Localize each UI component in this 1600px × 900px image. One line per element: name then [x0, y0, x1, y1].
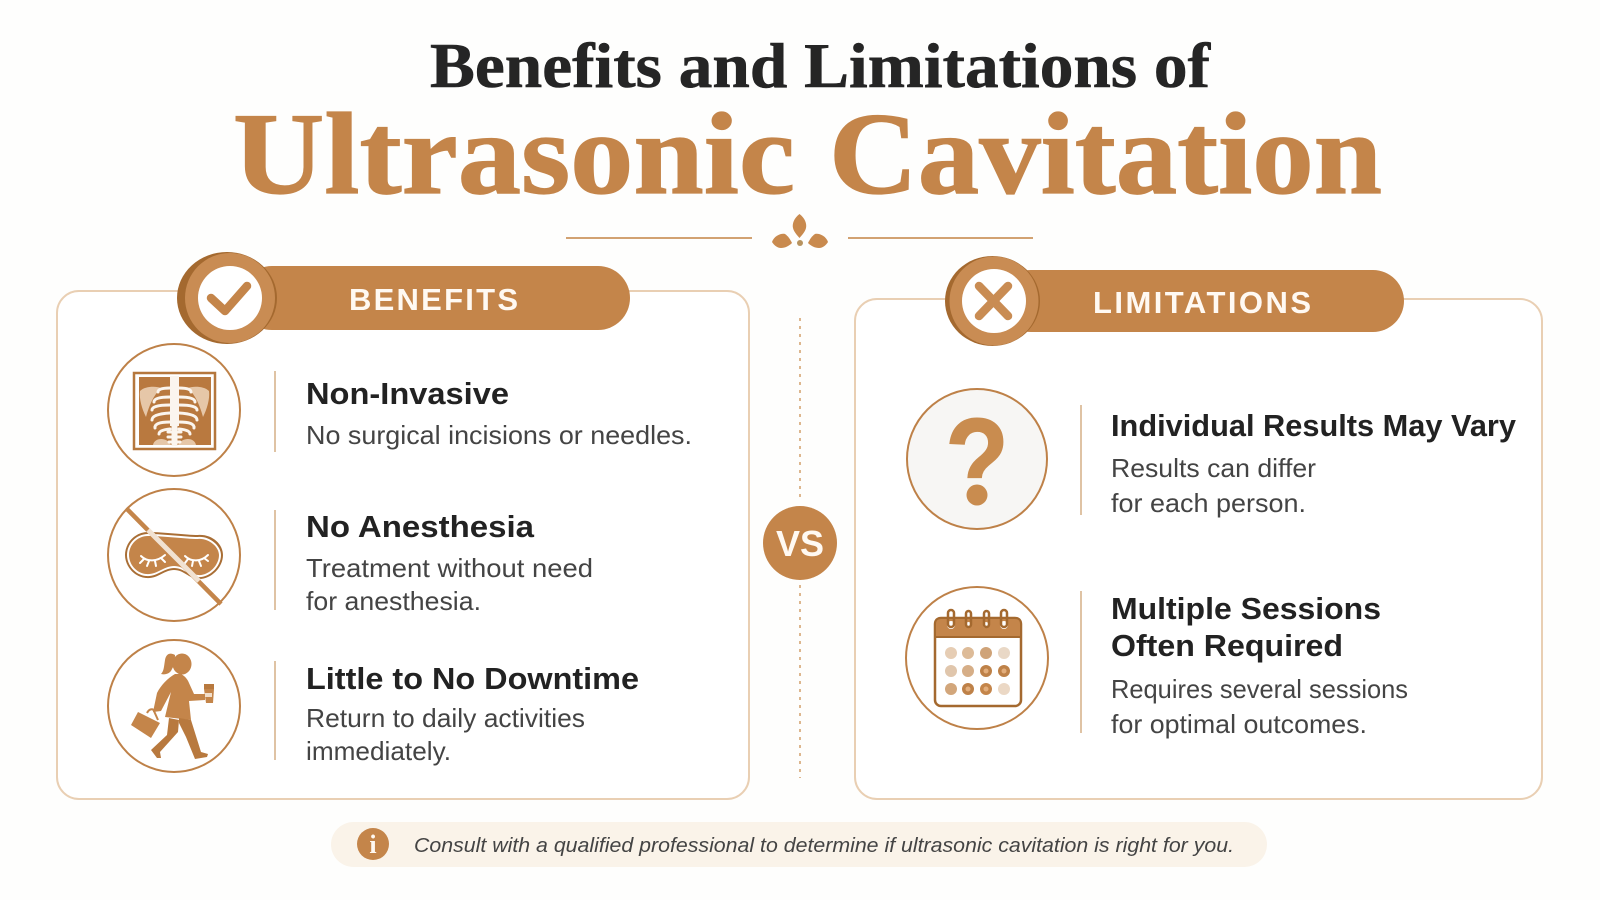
icon: question mark: [907, 389, 1047, 529]
footer note: [331, 822, 1267, 867]
icon: calendar: [906, 587, 1048, 729]
limitations header: LIMITATIONS: [1093, 285, 1311, 320]
item: no anesthesia: [274, 509, 593, 616]
icon: question mark: ?: [945, 393, 1009, 529]
title: Cavitation: [829, 90, 1382, 219]
vs badge: [763, 506, 837, 580]
item: little to no downtime: [274, 661, 639, 766]
item: multiple sessions: [1080, 591, 1408, 739]
title: Benefits and Limitations of: [430, 31, 1211, 101]
item: little to no downtime: Return to daily activities: [306, 703, 585, 733]
benefits header: [177, 252, 630, 344]
item: individual results: for each person.: [1111, 488, 1306, 518]
panel: limitations: [855, 299, 1542, 799]
ornament divider: [566, 214, 1033, 248]
item: individual results: [1080, 405, 1517, 518]
vs badge: VS: [776, 523, 824, 564]
item: no anesthesia: No Anesthesia: [306, 509, 535, 544]
item: non-invasive: Non-Invasive: [306, 376, 509, 411]
icon: walking person: [108, 640, 240, 772]
item: little to no downtime: Little to No Downtime: [306, 661, 639, 696]
limitations header: [945, 256, 1404, 346]
item: multiple sessions: Requires several sessions: [1111, 674, 1408, 704]
vs divider line: [799, 318, 801, 778]
item: individual results: Individual Results May Vary: [1111, 408, 1517, 443]
item: individual results: Results can differ: [1111, 453, 1316, 483]
item: multiple sessions: for optimal outcomes.: [1111, 709, 1367, 739]
icon: no anesthesia mask: [108, 489, 240, 621]
item: non-invasive: [274, 371, 692, 452]
item: multiple sessions: Multiple Sessions: [1111, 591, 1381, 626]
title: [233, 31, 1382, 219]
icon: x-ray: [108, 344, 240, 476]
panel: benefits: [57, 291, 749, 799]
item: little to no downtime: immediately.: [306, 736, 451, 766]
footer note: i: [369, 830, 377, 859]
benefits header: BENEFITS: [349, 282, 518, 317]
item: multiple sessions: Often Required: [1111, 628, 1343, 663]
item: no anesthesia: for anesthesia.: [306, 586, 481, 616]
item: non-invasive: No surgical incisions or needles.: [306, 420, 692, 450]
footer note: Consult with a qualified professional to determine if ultrasonic cavitation is right for you.: [414, 835, 1234, 857]
item: no anesthesia: Treatment without need: [306, 553, 593, 583]
title: Ultrasonic: [233, 90, 795, 219]
